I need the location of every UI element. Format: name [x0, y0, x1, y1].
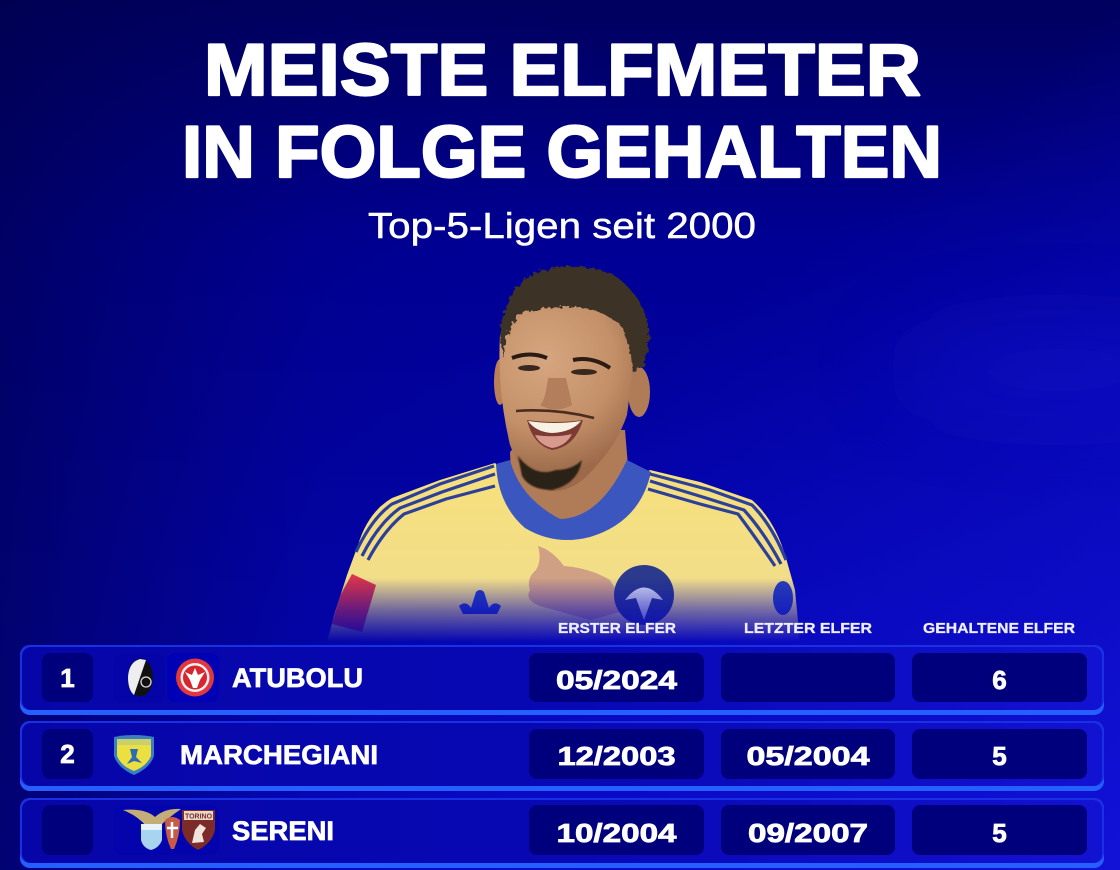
rank cell (empty) [42, 805, 93, 855]
shoulder stripes right [648, 474, 786, 566]
logo cells [114, 805, 219, 855]
rank cell 2 [42, 729, 93, 779]
name: MARCHEGIANI [180, 740, 378, 770]
adidas logo [459, 590, 501, 614]
hand [528, 546, 628, 620]
eagle badge [614, 565, 674, 625]
logo: Torino [182, 810, 215, 850]
logo cells [114, 653, 219, 702]
row 2: Marchegiani [20, 721, 1104, 791]
left ear [494, 359, 502, 405]
logo: Novara [165, 817, 180, 849]
jersey [327, 463, 800, 642]
last penalty [721, 805, 895, 855]
logo: Eintracht Frankfurt [176, 658, 214, 696]
eyebrows [512, 354, 610, 368]
saved: 6 [992, 665, 1007, 695]
head [499, 300, 636, 491]
rank cell 2: 2 [60, 739, 75, 769]
first penalty: 05/2024 [556, 665, 678, 695]
saved: 5 [992, 818, 1007, 848]
title: MEISTE ELFMETER [204, 30, 921, 111]
row 3: Sereni [20, 798, 1104, 868]
sponsor patch [773, 581, 793, 615]
first penalty [529, 805, 704, 855]
logo: Chievo Verona [114, 735, 154, 775]
name: SERENI [232, 816, 334, 846]
last penalty: 05/2004 [746, 741, 870, 771]
right ear [628, 367, 650, 417]
first penalty [529, 729, 704, 779]
neck [510, 430, 628, 519]
saved: 5 [992, 741, 1007, 771]
column headers [558, 620, 1075, 637]
bundesliga patch [332, 574, 376, 632]
subtitle: Top-5-Ligen seit 2000 [368, 205, 756, 246]
shoulder stripes left [356, 466, 495, 560]
goatee [518, 456, 582, 490]
first penalty: 12/2003 [558, 741, 676, 771]
last penalty [721, 729, 895, 779]
hair [500, 266, 650, 372]
column headers: GEHALTENE ELFER [923, 620, 1075, 637]
row 1: Atubolu [20, 645, 1104, 715]
title [182, 30, 942, 193]
title: IN FOLGE GEHALTEN [182, 112, 942, 193]
eyes [518, 365, 597, 375]
collar [496, 460, 651, 540]
saved [912, 653, 1087, 702]
logo: SC Freiburg [128, 658, 153, 696]
rank cell 1: 1 [60, 663, 75, 693]
first penalty: 10/2004 [556, 818, 677, 848]
logo: Lazio [123, 809, 181, 850]
saved [912, 729, 1087, 779]
column headers: ERSTER ELFER [558, 620, 676, 637]
last penalty: 09/2007 [748, 818, 868, 848]
column headers: LETZTER ELFER [744, 620, 872, 637]
player photo illustration [327, 266, 800, 642]
nose [540, 378, 572, 410]
first penalty [529, 653, 704, 702]
name: ATUBOLU [232, 663, 363, 693]
saved [912, 805, 1087, 855]
last penalty (empty) [721, 653, 895, 702]
logo: Torino: TORINO [185, 814, 213, 820]
rank cell 1 [42, 653, 93, 702]
mouth [516, 410, 594, 418]
